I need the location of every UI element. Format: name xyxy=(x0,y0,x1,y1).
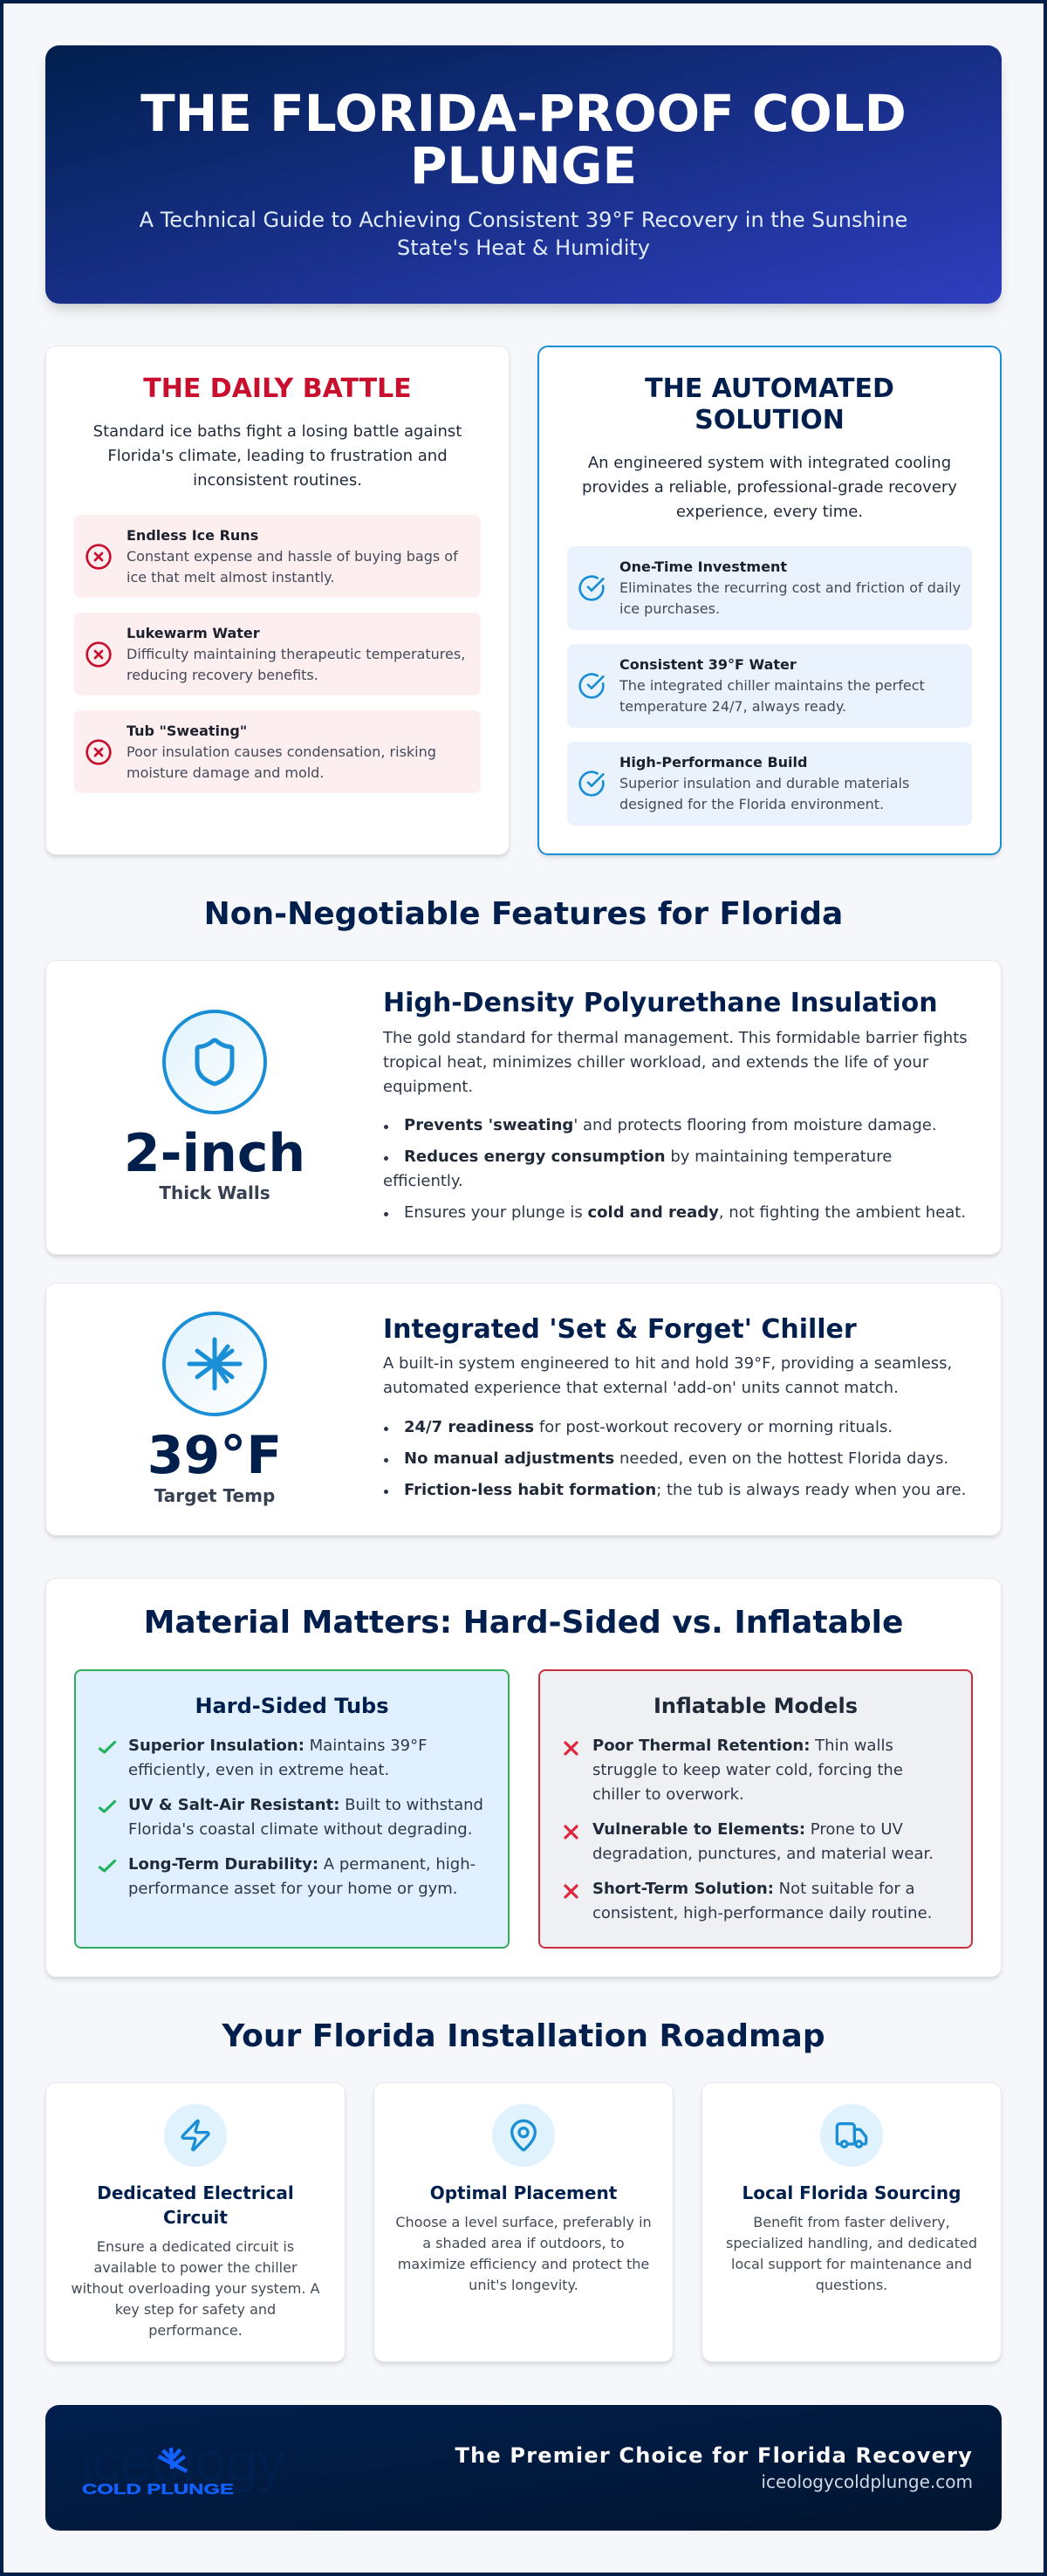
panel: chiller feature xyxy=(45,1283,1002,1536)
subtitle xyxy=(140,208,907,260)
icon: snowflake xyxy=(162,1312,267,1416)
item: endless ice runs xyxy=(74,515,481,598)
header banner xyxy=(45,45,1002,304)
drawback: Poor Thermal Retention: Thin walls xyxy=(592,1737,893,1755)
drawback: consistent, high-performance daily routine. xyxy=(592,1904,932,1922)
benefit xyxy=(128,1737,427,1779)
intro text: inconsistent routines. xyxy=(193,471,362,490)
step title: Circuit xyxy=(163,2207,228,2228)
drawback: chiller to overwork. xyxy=(592,1785,744,1804)
item: consistent water xyxy=(567,644,972,728)
icon: check xyxy=(98,1799,117,1813)
item: tub sweating: Poor insulation causes condensation, risking xyxy=(127,743,436,759)
icon: lightning bolt xyxy=(164,2104,227,2167)
drawback: degradation, punctures, and material wear. xyxy=(592,1845,934,1863)
benefit: Superior Insulation: Maintains 39°F xyxy=(128,1737,427,1755)
panel: the daily battle xyxy=(45,346,510,855)
icon: check xyxy=(98,1740,117,1754)
item: high-performance build: Superior insulation and durable materials xyxy=(619,775,909,791)
drawback: struggle to keep water cold, forcing the xyxy=(592,1761,903,1779)
feature description xyxy=(383,1354,952,1397)
step description: without overloading your system. A xyxy=(72,2280,319,2297)
footer url: iceologycoldplunge.com xyxy=(761,2471,973,2492)
item: consistent water: The integrated chiller maintains the perfect xyxy=(619,677,925,694)
heading: the daily battle: THE DAILY BATTLE xyxy=(143,373,412,404)
benefit: Florida's coastal climate without degrading. xyxy=(128,1820,472,1839)
heading: material matters: Material Matters: Hard-Sided vs. Inflatable xyxy=(144,1605,903,1641)
stat label: Thick Walls xyxy=(159,1182,270,1203)
step description: performance. xyxy=(148,2322,243,2339)
panel: hard-sided tubs xyxy=(74,1669,510,1949)
step title: Local Florida Sourcing xyxy=(742,2182,961,2203)
item: tub sweating xyxy=(74,710,481,793)
benefit: Long-Term Durability: A permanent, high- xyxy=(128,1855,476,1874)
heading: installation roadmap: Your Florida Installation Roadmap xyxy=(222,2018,825,2054)
step description: local support for maintenance and xyxy=(731,2256,972,2272)
list: hard-sided benefits xyxy=(98,1737,483,1898)
feature description: automated experience that external 'add-on' units cannot match. xyxy=(383,1379,899,1397)
item: lukewarm water: Difficulty maintaining therapeutic temperatures, xyxy=(127,646,465,661)
column heading: Inflatable Models xyxy=(654,1694,858,1718)
icon: cross xyxy=(564,1825,578,1840)
benefit: UV & Salt-Air Resistant: Built to withstand xyxy=(128,1796,483,1814)
title: THE FLORIDA-PROOF COLD xyxy=(140,84,907,143)
heading: the automated solution: THE AUTOMATED xyxy=(645,373,894,404)
step description xyxy=(726,2214,977,2293)
drawback: Vulnerable to Elements: Prone to UV xyxy=(592,1820,903,1839)
feature description: A built-in system engineered to hit and hold 39°F, providing a seamless, xyxy=(383,1354,952,1373)
icon: cross xyxy=(564,1884,578,1899)
drawback xyxy=(592,1820,934,1863)
item: high-performance build: High-Performance Build xyxy=(619,754,807,771)
item: high-performance build: designed for the Florida environment. xyxy=(619,796,884,812)
feature list xyxy=(383,1116,966,1222)
feature list: efficiently. xyxy=(383,1172,463,1190)
feature heading: High-Density Polyurethane Insulation xyxy=(383,988,938,1018)
logo: iceology xyxy=(80,2431,285,2493)
panel: optimal placement xyxy=(373,2082,674,2362)
feature list: Prevents 'sweating' and protects flooring from moisture damage. xyxy=(404,1116,937,1134)
stat label: Target Temp xyxy=(154,1485,275,1506)
panel: local sourcing xyxy=(701,2082,1002,2362)
item: consistent water: temperature 24/7, always ready. xyxy=(619,698,846,715)
panel: the automated solution xyxy=(537,346,1002,855)
step title: Dedicated Electrical xyxy=(97,2182,294,2203)
benefit xyxy=(128,1796,483,1839)
list: inflatable drawbacks xyxy=(564,1737,934,1922)
logo: COLD PLUNGE xyxy=(82,2481,234,2497)
stat: 39 degrees: 39°F xyxy=(147,1425,282,1486)
feature description: equipment. xyxy=(383,1078,473,1096)
icon: shield xyxy=(162,1010,267,1114)
item: one-time investment: Eliminates the recurring cost and friction of daily xyxy=(619,579,961,596)
step description xyxy=(72,2238,319,2339)
intro text: Standard ice baths fight a losing battle against xyxy=(93,422,462,441)
intro text: An engineered system with integrated cooling xyxy=(588,454,951,472)
benefit: efficiently, even in extreme heat. xyxy=(128,1761,389,1779)
item: tub sweating: moisture damage and mold. xyxy=(127,764,324,780)
step description: specialized handling, and dedicated xyxy=(726,2235,977,2251)
item: lukewarm water xyxy=(74,613,481,695)
heading: the automated solution: SOLUTION xyxy=(695,405,845,435)
subtitle: State's Heat & Humidity xyxy=(397,236,650,260)
item: one-time investment: ice purchases. xyxy=(619,600,720,617)
item: endless ice runs: ice that melt almost instantly. xyxy=(127,569,334,585)
step description: maximize efficiency and protect the xyxy=(398,2256,649,2272)
step description: unit's longevity. xyxy=(469,2277,578,2293)
feature description: The gold standard for thermal management. This formidable barrier fights xyxy=(383,1029,968,1047)
subtitle: A Technical Guide to Achieving Consistent 39°F Recovery in the Sunshine xyxy=(140,208,907,232)
icon: map pin xyxy=(492,2104,555,2167)
item: high-performance build xyxy=(567,742,972,826)
panel: material comparison xyxy=(45,1578,1002,1977)
intro text: experience, every time. xyxy=(676,503,863,521)
column heading: Hard-Sided Tubs xyxy=(195,1694,389,1718)
step title xyxy=(97,2182,294,2228)
intro text xyxy=(93,422,462,490)
heading: the automated solution xyxy=(645,373,894,435)
step description: a shaded area if outdoors, to xyxy=(422,2235,625,2251)
item: endless ice runs: Constant expense and hassle of buying bags of xyxy=(127,548,458,564)
step description: Benefit from faster delivery, xyxy=(753,2214,950,2230)
icon: truck xyxy=(820,2104,883,2167)
step description: key step for safety and xyxy=(115,2301,276,2318)
feature list xyxy=(384,1418,966,1499)
step description xyxy=(395,2214,652,2293)
stat: 2-inch: 2-inch xyxy=(124,1123,305,1184)
icon: cross xyxy=(564,1741,578,1756)
feature list: Reduces energy consumption by maintaining temperature xyxy=(404,1148,892,1166)
footer tagline: The Premier Choice for Florida Recovery xyxy=(455,2443,973,2468)
panel: electrical circuit xyxy=(45,2082,346,2362)
feature list: Ensures your plunge is cold and ready, not fighting the ambient heat. xyxy=(404,1203,966,1222)
feature description: tropical heat, minimizes chiller workload, and extends the life of your xyxy=(383,1053,928,1072)
panel: inflatable models xyxy=(538,1669,973,1949)
item: lukewarm water: reducing recovery benefits. xyxy=(127,667,318,682)
step description: Ensure a dedicated circuit is xyxy=(97,2238,294,2255)
footer banner xyxy=(45,2405,1002,2531)
item: one-time investment xyxy=(567,546,972,630)
step description: Choose a level surface, preferably in xyxy=(395,2214,652,2230)
item: consistent water: Consistent 39°F Water xyxy=(619,656,797,673)
item: lukewarm water: Lukewarm Water xyxy=(127,625,260,641)
drawback xyxy=(592,1880,932,1922)
drawback: Short-Term Solution: Not suitable for a xyxy=(592,1880,914,1898)
intro text: provides a reliable, professional-grade recovery xyxy=(582,478,957,497)
feature list: No manual adjustments needed, even on the hottest Florida days. xyxy=(404,1449,948,1468)
title xyxy=(140,84,907,195)
title: PLUNGE xyxy=(410,136,637,195)
feature list: Friction-less habit formation; the tub is always ready when you are. xyxy=(404,1481,966,1499)
intro text xyxy=(582,454,957,521)
feature heading: Integrated 'Set & Forget' Chiller xyxy=(383,1314,857,1345)
heading: non-negotiable features: Non-Negotiable Features for Florida xyxy=(204,896,843,932)
benefit: performance asset for your home or gym. xyxy=(128,1880,458,1898)
step title: Optimal Placement xyxy=(430,2182,617,2203)
step description: questions. xyxy=(816,2277,887,2293)
drawback xyxy=(592,1737,903,1804)
item: endless ice runs: Endless Ice Runs xyxy=(127,527,258,543)
intro text: Florida's climate, leading to frustration and xyxy=(107,447,448,465)
step description: available to power the chiller xyxy=(93,2259,298,2276)
benefit xyxy=(128,1855,476,1898)
item: tub sweating: Tub "Sweating" xyxy=(127,723,247,738)
panel: insulation feature xyxy=(45,960,1002,1255)
item: one-time investment: One-Time Investment xyxy=(619,558,787,575)
feature description xyxy=(382,1029,968,1096)
icon: check xyxy=(98,1859,117,1873)
feature list: 24/7 readiness for post-workout recovery or morning rituals. xyxy=(404,1418,893,1436)
